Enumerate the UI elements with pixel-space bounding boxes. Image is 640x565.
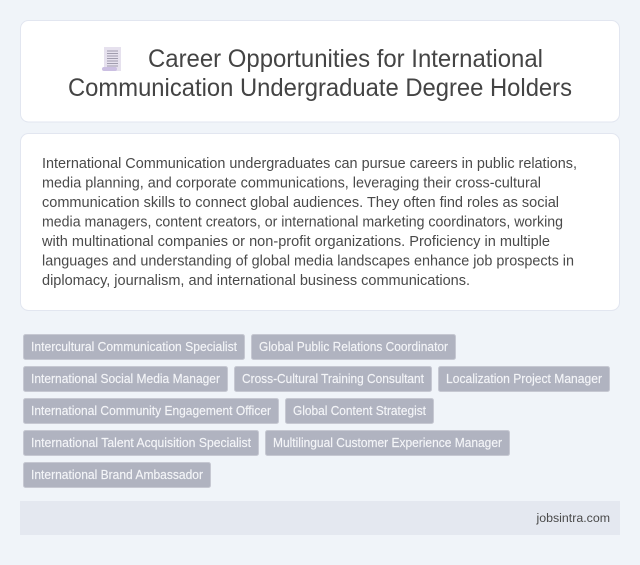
tag xyxy=(252,334,456,360)
tag xyxy=(24,462,210,488)
tag: International Talent Acquisition Specialist xyxy=(31,436,251,450)
icon: paper scroll xyxy=(102,47,121,71)
text block: description: diplomacy, journalism, and international business communications. xyxy=(42,273,470,289)
tag: Global Public Relations Coordinator xyxy=(259,340,448,354)
text block: description: media managers, content creators, or international marketing coordinators, working xyxy=(42,214,563,230)
tag xyxy=(234,366,432,392)
text block: description xyxy=(41,156,577,289)
tag xyxy=(286,398,434,424)
text block: description: media planning, and corporate communications, leveraging their cross-cultural xyxy=(42,176,541,192)
footer: jobsintra.com xyxy=(535,511,610,525)
tag xyxy=(24,430,258,456)
tag: Global Content Strategist xyxy=(293,404,426,418)
text block: description: communication skills to connect global audiences. They often find roles as social xyxy=(42,195,559,211)
tag: International Social Media Manager xyxy=(31,372,220,386)
tag xyxy=(24,398,278,424)
footer xyxy=(20,501,620,535)
panel: header xyxy=(20,20,620,122)
tag: Localization Project Manager xyxy=(446,372,602,386)
tag: Cross-Cultural Training Consultant xyxy=(242,372,424,386)
tag: International Community Engagement Officer xyxy=(31,404,271,418)
tag xyxy=(266,430,510,456)
tag xyxy=(24,366,228,392)
tag: Multilingual Customer Experience Manager xyxy=(273,436,502,450)
tag: International Brand Ambassador xyxy=(31,468,203,482)
text block: description: International Communication undergraduates can pursue careers in public relations, xyxy=(42,156,577,172)
tag xyxy=(438,366,610,392)
title xyxy=(68,45,572,102)
text block: description: with multinational companies or non-profit organizations. Proficiency in multiple xyxy=(41,234,550,250)
title: Career Opportunities for International xyxy=(148,45,543,73)
panel: career tags xyxy=(24,334,610,488)
tag xyxy=(24,334,244,360)
text block: description: languages and understanding of global media landscapes enhance job prospects in xyxy=(42,254,574,270)
title: Communication Undergraduate Degree Holders xyxy=(68,74,572,102)
panel: description xyxy=(20,134,620,310)
tag: Intercultural Communication Specialist xyxy=(31,340,237,354)
